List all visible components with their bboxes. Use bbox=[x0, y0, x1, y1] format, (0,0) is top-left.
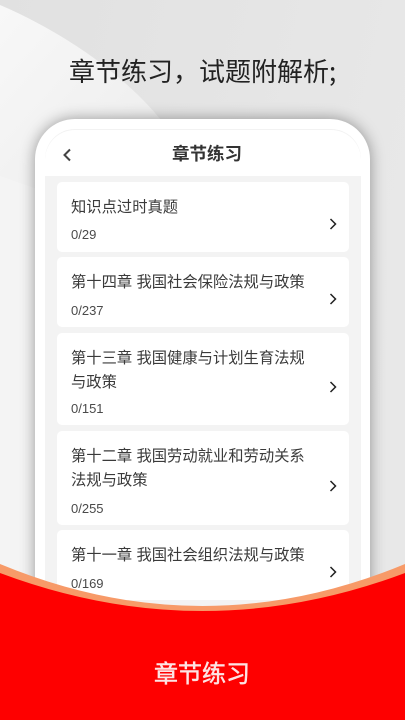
card: chapter 13 bbox=[57, 333, 349, 425]
card: chapter 12: 0/255 bbox=[71, 501, 104, 516]
card: chapter 13: 0/151 bbox=[71, 401, 104, 416]
card: chapter 13: 第十三章 我国健康与计划生育法规 bbox=[71, 350, 305, 367]
card: chapter 14: 第十四章 我国社会保险法规与政策 bbox=[71, 274, 305, 291]
app header bbox=[45, 129, 361, 176]
icon: chevron bbox=[330, 294, 336, 304]
card: chapter 14: 0/237 bbox=[71, 303, 104, 318]
card: chapter 12 bbox=[57, 431, 349, 525]
screen bbox=[45, 129, 361, 639]
icon: chevron bbox=[330, 218, 336, 230]
icon: chevron bbox=[330, 566, 336, 578]
phone mockup bbox=[35, 119, 370, 639]
card: past exam questions: 0/29 bbox=[71, 227, 96, 242]
card: chapter 14 bbox=[57, 257, 349, 327]
card: chapter 12: 法规与政策 bbox=[71, 472, 148, 489]
card: chapter 13: 与政策 bbox=[71, 374, 117, 391]
card: chapter 11: 第十一章 我国社会组织法规与政策 bbox=[71, 547, 305, 564]
footer label: 章节练习 bbox=[154, 654, 250, 689]
card: past exam questions bbox=[57, 182, 349, 252]
title: 章节练习，试题附解析; bbox=[69, 52, 336, 89]
icon: back arrow bbox=[63, 148, 71, 162]
icon: chevron bbox=[330, 382, 336, 392]
header title: 章节练习 bbox=[172, 144, 242, 164]
icon: chevron bbox=[330, 480, 336, 492]
card: chapter 12: 第十二章 我国劳动就业和劳动关系 bbox=[71, 448, 305, 465]
card: past exam questions: 知识点过时真题 bbox=[71, 199, 178, 216]
card: chapter 11: 0/169 bbox=[71, 576, 104, 591]
card: chapter 11 bbox=[57, 530, 349, 600]
